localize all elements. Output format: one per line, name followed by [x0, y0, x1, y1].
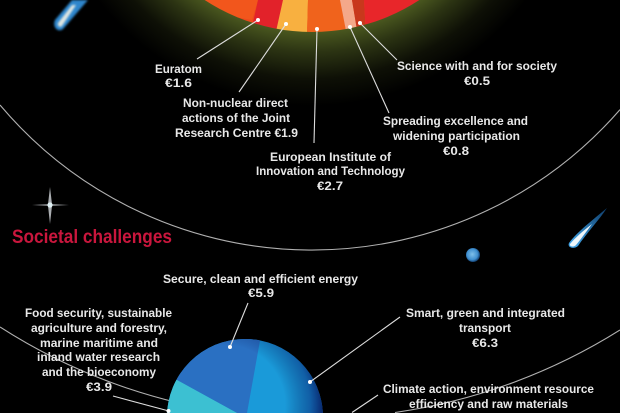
- leader: European Institute: [314, 27, 319, 143]
- label: Euratom: Euratom: [155, 62, 202, 76]
- label: Smart transport: Smart, green and integrated: [406, 306, 565, 320]
- heading: societal challenges: Societal challenges: [12, 227, 172, 248]
- label: Euratom: [155, 62, 202, 90]
- label: European Institute: European Institute of: [270, 150, 392, 164]
- leader: Smart transport: [308, 317, 400, 384]
- label: Food security: €3.9: [86, 380, 112, 394]
- label: Food security: marine maritime and: [40, 336, 158, 350]
- label: Joint Research Centre: actions of the Joint: [182, 111, 290, 125]
- star: [32, 187, 69, 224]
- label: Joint Research Centre: Non-nuclear direct: [183, 96, 288, 110]
- label: Food security: inland water research: [37, 350, 160, 364]
- label: Spreading excellence: [383, 114, 528, 158]
- text labels: [25, 59, 594, 411]
- label: Climate action: efficiency and raw materials: [409, 397, 568, 411]
- orbit: inner ring: [0, 105, 620, 250]
- label: Secure energy: €5.9: [248, 286, 274, 300]
- label: European Institute: €2.7: [317, 179, 343, 193]
- label: Climate action: [383, 382, 594, 411]
- label: European Institute: Innovation and Technology: [256, 164, 405, 178]
- leader: Climate action: [352, 395, 378, 412]
- label: European Institute: [256, 150, 405, 193]
- label: Joint Research Centre: [175, 96, 298, 140]
- label: Euratom: €1.6: [165, 76, 192, 90]
- label: Food security: [25, 306, 172, 394]
- leader: Joint Research Centre: [239, 22, 288, 92]
- label: Secure energy: Secure, clean and efficient energy: [163, 272, 358, 286]
- leader: Spreading excellence: [348, 25, 389, 113]
- comet: top left: [54, 0, 88, 30]
- label: Climate action: Climate action, environment resource: [383, 382, 594, 396]
- label: Smart transport: €6.3: [472, 336, 498, 350]
- small blue planet: [466, 248, 480, 262]
- label: Smart transport: [406, 306, 565, 350]
- label: Food security: and the bioeconomy: [42, 365, 156, 379]
- label: Spreading excellence: Spreading excellence and: [383, 114, 528, 128]
- label: Secure energy: [163, 272, 358, 300]
- label: Food security: Food security, sustainable: [25, 306, 172, 320]
- sun glow: [40, 0, 584, 108]
- label: Joint Research Centre: Research Centre €1.9: [175, 126, 298, 140]
- label: Science with and for society: Science with and for society: [397, 59, 557, 73]
- orbit: outer ring: [0, 327, 620, 412]
- label: Spreading excellence: widening participation: [392, 129, 520, 143]
- label: Food security: agriculture and forestry,: [31, 321, 167, 335]
- leader: Science with and for society: [358, 21, 397, 60]
- leader: Secure energy: [228, 303, 248, 349]
- label: Spreading excellence: €0.8: [443, 144, 469, 158]
- sun pie chart: [204, 0, 420, 32]
- leader: Food security: [113, 396, 170, 413]
- comet: right: [569, 208, 607, 248]
- label: Science with and for society: €0.5: [464, 74, 490, 88]
- blue planet pie chart: [167, 339, 323, 413]
- label: Smart transport: transport: [459, 321, 511, 335]
- label: Science with and for society: [397, 59, 557, 88]
- leader: Euratom: [197, 18, 260, 59]
